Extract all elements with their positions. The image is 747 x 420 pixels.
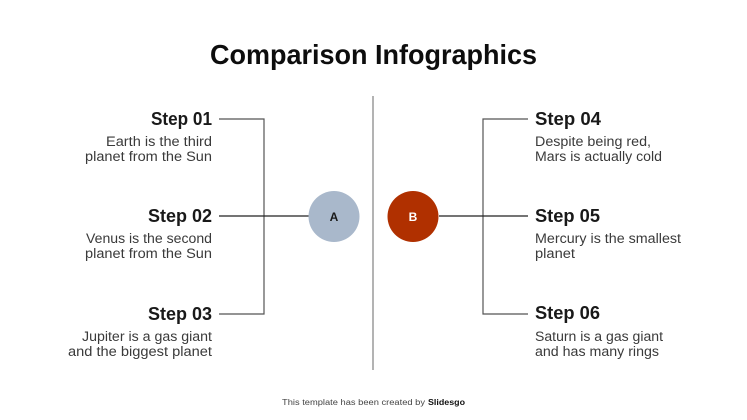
step 06 (535, 302, 663, 359)
step 05: Step 05 (535, 205, 600, 226)
left middle connector (219, 215, 309, 217)
step 03: and the biggest planet (68, 344, 212, 359)
step 05 (535, 205, 681, 261)
step 05: planet (535, 246, 575, 261)
step 04 (535, 108, 662, 164)
footer credit: Slidesgo (428, 398, 465, 407)
center divider (372, 96, 374, 370)
circle A (308, 191, 360, 242)
circle B (388, 191, 438, 242)
step 02: Step 02 (148, 205, 212, 226)
right bracket connector (483, 119, 528, 314)
step 06: and has many rings (535, 344, 659, 359)
footer credit (282, 398, 465, 407)
step 04: Step 04 (535, 108, 602, 129)
step 04: Mars is actually cold (535, 149, 662, 164)
circle A: A (330, 210, 339, 224)
circle B: B (409, 210, 418, 224)
step 02: planet from the Sun (85, 246, 212, 261)
step 02 (85, 205, 212, 261)
step 01: planet from the Sun (85, 149, 212, 164)
step 06: Saturn is a gas giant (535, 329, 663, 344)
step 03: Step 03 (148, 303, 212, 324)
step 06: Step 06 (535, 302, 600, 323)
step 01: Step 01 (151, 108, 212, 129)
left bracket connector (219, 119, 264, 314)
step 05: Mercury is the smallest (535, 231, 681, 246)
step 03 (68, 303, 212, 359)
title: Comparison Infographics (210, 39, 537, 70)
step 01 (85, 108, 212, 164)
step 03: Jupiter is a gas giant (82, 329, 212, 344)
step 04: Despite being red, (535, 134, 651, 149)
step 02: Venus is the second (86, 231, 212, 246)
step 01: Earth is the third (106, 134, 212, 149)
footer credit: This template has been created by (282, 398, 425, 407)
right middle connector (439, 215, 528, 217)
